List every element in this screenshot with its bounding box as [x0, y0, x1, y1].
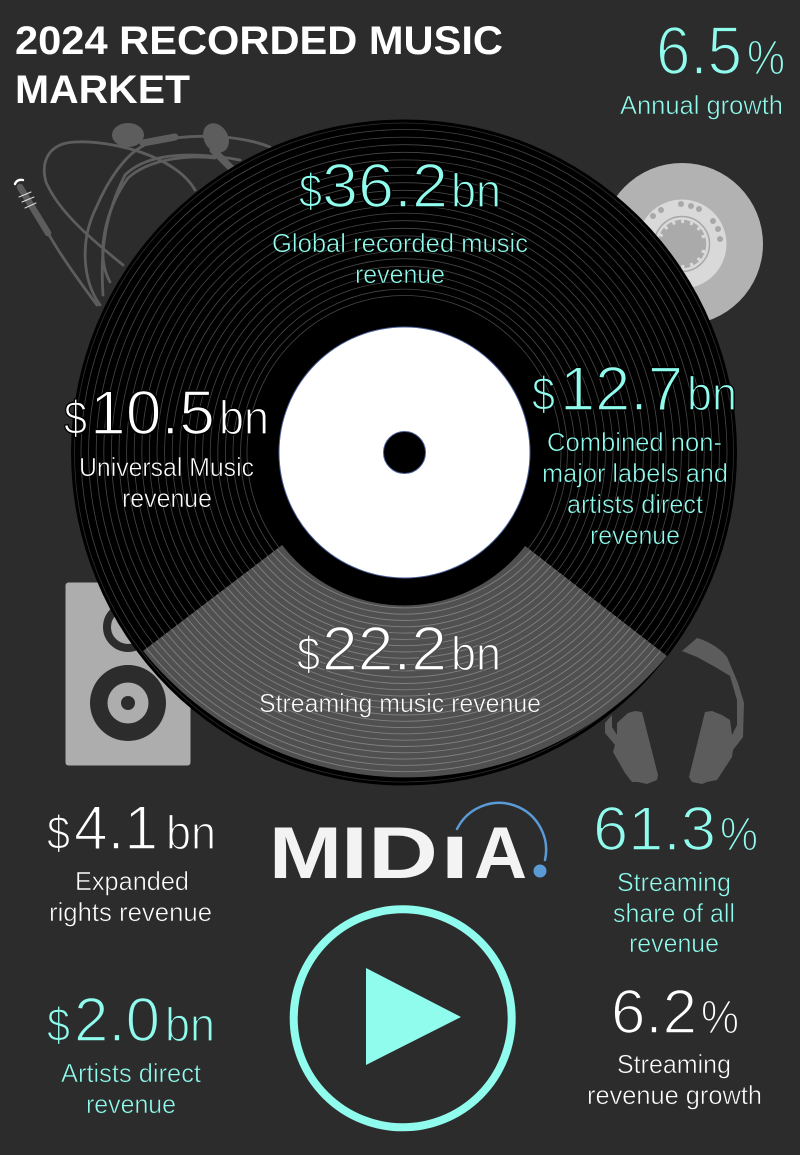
wedge: streaming segment — [143, 452, 667, 777]
logo: MIDiA: M — [269, 813, 342, 894]
stat: streaming revenue — [259, 615, 541, 718]
stat: expanded rights revenue: rights revenue — [49, 897, 212, 927]
stat: non-major labels revenue: $ — [532, 367, 555, 420]
stat: non-major labels revenue: Combined non- — [547, 427, 722, 457]
stat: streaming growth: 6.2 — [611, 978, 697, 1047]
stat: artists direct revenue: $ — [47, 998, 70, 1051]
stat: streaming share: share of all — [613, 898, 735, 928]
icon: headphones — [605, 638, 744, 784]
stat: expanded rights revenue: 4.1 — [74, 794, 158, 863]
stat: annual growth — [620, 13, 785, 120]
stat: expanded rights revenue — [47, 794, 216, 927]
stat: streaming share: revenue — [629, 928, 719, 958]
stat: annual growth: Annual growth — [620, 90, 783, 120]
vinyl label — [279, 327, 530, 578]
stat: non-major labels revenue: 12.7 — [560, 355, 683, 424]
stat: universal music revenue: $ — [64, 391, 87, 444]
logo: MIDiA — [269, 803, 546, 895]
logo: MIDiA: ı — [440, 807, 470, 895]
stat: non-major labels revenue: revenue — [590, 520, 680, 550]
stat: expanded rights revenue: Expanded — [75, 866, 189, 896]
logo: MIDiA: A — [474, 813, 527, 894]
stat: non-major labels revenue: bn — [687, 367, 737, 420]
stat: streaming revenue: $ — [297, 627, 320, 680]
stat: global revenue — [272, 152, 528, 289]
stat: streaming share: Streaming — [617, 867, 731, 897]
stat: global revenue: bn — [451, 164, 501, 217]
stat: streaming growth: Streaming — [617, 1049, 731, 1079]
stat: non-major labels revenue — [532, 355, 737, 550]
stat: universal music revenue: Universal Music — [79, 452, 254, 482]
stat: global revenue: $ — [299, 164, 322, 217]
stat: expanded rights revenue: $ — [47, 806, 70, 859]
vinyl record — [71, 108, 737, 786]
stat: streaming share — [593, 795, 758, 958]
spindle hole — [384, 432, 426, 474]
title: 2024 RECORDED MUSIC — [15, 19, 503, 63]
stat: annual growth: 6.5 — [656, 13, 742, 89]
stat: non-major labels revenue: major labels and — [542, 458, 728, 488]
stat: global revenue: 36.2 — [322, 152, 448, 221]
logo: MIDiA: I — [341, 813, 368, 894]
stat: artists direct revenue: 2.0 — [74, 986, 160, 1055]
stat: artists direct revenue: bn — [165, 998, 215, 1051]
stat: global revenue: Global recorded music — [272, 228, 528, 258]
stat: streaming revenue: 22.2 — [322, 615, 447, 684]
stat: streaming growth: % — [701, 990, 739, 1043]
stat: artists direct revenue — [47, 986, 215, 1119]
title: MARKET — [15, 68, 190, 112]
stat: streaming share: 61.3 — [593, 795, 716, 864]
stat: universal music revenue: 10.5 — [90, 379, 215, 448]
stat: expanded rights revenue: bn — [166, 806, 216, 859]
stat: universal music revenue: bn — [219, 391, 269, 444]
stat: streaming growth — [587, 978, 762, 1110]
stat: streaming growth: revenue growth — [587, 1080, 762, 1110]
stat: annual growth: % — [747, 32, 785, 85]
icon: cd — [601, 163, 763, 325]
title — [15, 19, 503, 112]
stat: streaming revenue: Streaming music revenue — [259, 688, 541, 718]
logo: MIDiA: D — [368, 813, 438, 894]
icon: speaker — [66, 582, 190, 766]
stat: universal music revenue: revenue — [122, 483, 212, 513]
stat: universal music revenue — [64, 379, 269, 513]
stat: non-major labels revenue: artists direct — [567, 489, 704, 519]
icon: earphones — [15, 119, 270, 305]
stat: artists direct revenue: revenue — [86, 1089, 176, 1119]
stat: artists direct revenue: Artists direct — [61, 1058, 202, 1088]
stat: streaming share: % — [720, 807, 758, 860]
icon: play button — [294, 909, 512, 1127]
stat: global revenue: revenue — [355, 259, 445, 289]
stat: streaming revenue: bn — [451, 627, 501, 680]
